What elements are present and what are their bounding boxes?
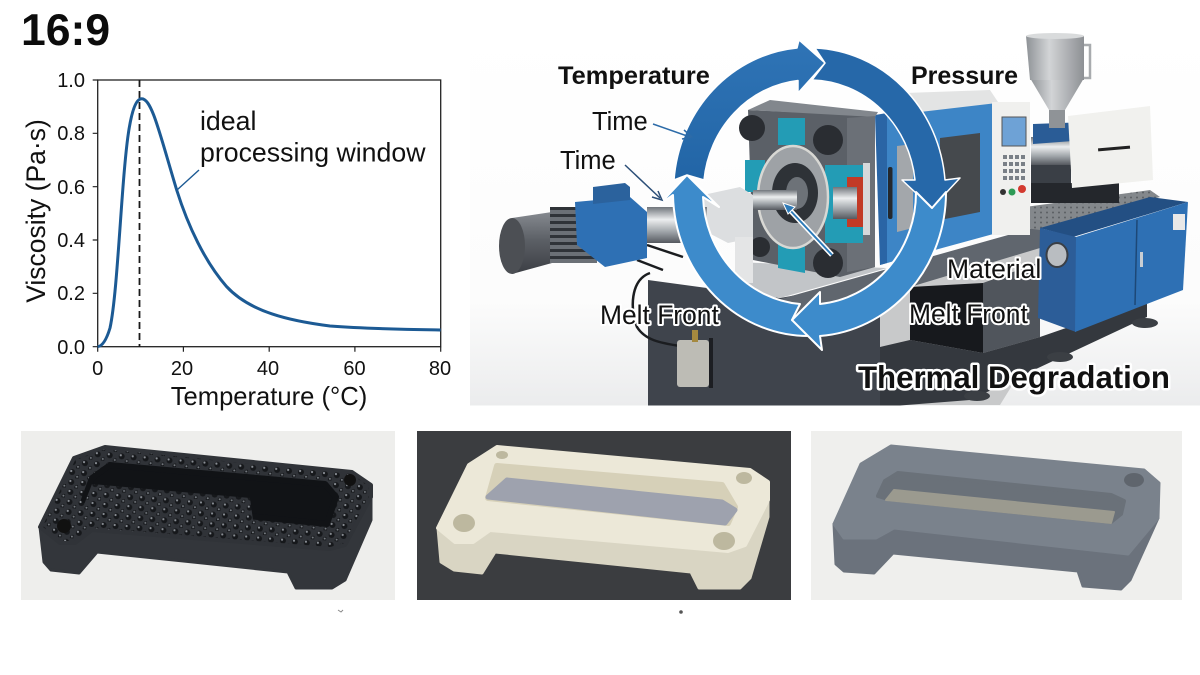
label: Melt Front left: Melt Front: [600, 300, 719, 330]
line chart: viscosity vs temperature: [21, 70, 451, 411]
stray mark: [679, 610, 683, 614]
cables: [633, 245, 683, 346]
axis ticks: [93, 80, 441, 352]
x tick labels: 60: [343, 358, 366, 380]
y tick labels: 1.0: [57, 70, 85, 92]
valve: [677, 330, 713, 388]
viscosity curve: [98, 99, 441, 347]
cavity floor: [886, 490, 1114, 523]
y tick labels: 0.8: [57, 123, 85, 145]
part side: [834, 518, 1158, 589]
stray mark: [338, 610, 343, 612]
cavity floor dots: [82, 484, 255, 535]
label: Thermal Degradation: Thermal Degradation: [858, 360, 1170, 395]
x axis title: Temperature (°C): [171, 383, 367, 411]
cycle arrow: lower right: [792, 192, 946, 350]
x tick labels: 80: [429, 358, 451, 380]
control panel: [992, 102, 1030, 235]
y axis title: Viscosity (Pa·s): [21, 119, 51, 303]
inner pointer arrow: [783, 203, 832, 255]
label: Time lower: Time: [560, 147, 616, 175]
leader: time to shaft: [625, 165, 662, 200]
bracket: [703, 187, 753, 283]
photo background: [21, 431, 395, 600]
clamp housing: [875, 90, 1000, 265]
hole: [713, 532, 735, 550]
photo: cream part on dark: [417, 431, 791, 600]
machine bed rail: [770, 226, 1040, 318]
round platen: [758, 146, 828, 248]
machine feet: [964, 318, 1158, 401]
part top face: [438, 447, 768, 551]
floor background: [470, 30, 1200, 406]
cycle arrow: upper right: [812, 48, 960, 208]
motor: [499, 183, 647, 274]
cavity floor: [488, 480, 735, 523]
part side: [438, 490, 768, 588]
knobs: [739, 115, 765, 141]
mold block: [739, 100, 878, 278]
part top face: [834, 446, 1159, 554]
y tick labels: 0.2: [57, 283, 85, 305]
shaft: [753, 190, 797, 210]
hole: [453, 514, 475, 532]
perforated bed top: [1025, 190, 1160, 230]
gauge: [1046, 243, 1068, 267]
y tick labels: 0.0: [57, 337, 85, 359]
right base with opening: [880, 245, 1147, 406]
hopper: [1026, 33, 1090, 128]
window: [940, 133, 980, 220]
part cavity wall: [84, 465, 336, 524]
machine base block: [648, 280, 880, 406]
label: Pressure: Pressure: [911, 62, 1018, 90]
x tick labels: 0: [92, 358, 103, 380]
annotation: ideal processing window: processing window: [200, 138, 426, 168]
hole: [736, 472, 752, 484]
photo background: [811, 431, 1182, 600]
y tick labels: 0.6: [57, 177, 85, 199]
leader: time to ring: [653, 124, 692, 139]
photo: black textured part: [21, 431, 395, 600]
door handle: [888, 167, 892, 219]
x tick labels: [92, 358, 451, 380]
injection unit: [1031, 106, 1153, 203]
guide rods: [833, 187, 857, 219]
y tick labels: 0.4: [57, 230, 85, 252]
panel: injection molding machine illustration: [470, 30, 1200, 406]
red core: [847, 177, 863, 227]
cavity wall: [878, 473, 1124, 522]
label: Melt Front right: Melt Front: [909, 299, 1028, 329]
silver strip: [863, 163, 870, 235]
y tick labels: [57, 70, 85, 359]
part side: [40, 490, 371, 588]
screw hole: [57, 519, 71, 533]
cavity wall: [488, 466, 735, 523]
annotation leader: [177, 170, 199, 190]
bed table: [735, 262, 887, 298]
teal inserts: [745, 118, 863, 273]
part top face: [40, 447, 371, 549]
photo background: [417, 431, 791, 600]
cycle arrow: lower left: [659, 175, 812, 336]
x tick labels: 20: [171, 358, 193, 380]
x tick labels: 40: [257, 358, 279, 380]
label: Material: Material: [947, 254, 1041, 284]
hole: [1124, 473, 1144, 487]
label: Temperature: Temperature: [558, 62, 710, 90]
annotation: ideal processing window: ideal: [200, 106, 256, 136]
drive shaft: [647, 207, 707, 243]
hole: [496, 451, 508, 459]
plot frame: [98, 80, 441, 347]
inner rails: [897, 144, 913, 232]
cycle arrow: upper left: [674, 40, 825, 180]
photo: grey part: [811, 431, 1182, 600]
label: Time upper: Time: [592, 108, 648, 136]
electrical cabinet: [1038, 197, 1188, 332]
screw hole: [344, 474, 356, 486]
peak dashed line: [138, 80, 140, 347]
title: 16:9: [21, 6, 110, 55]
